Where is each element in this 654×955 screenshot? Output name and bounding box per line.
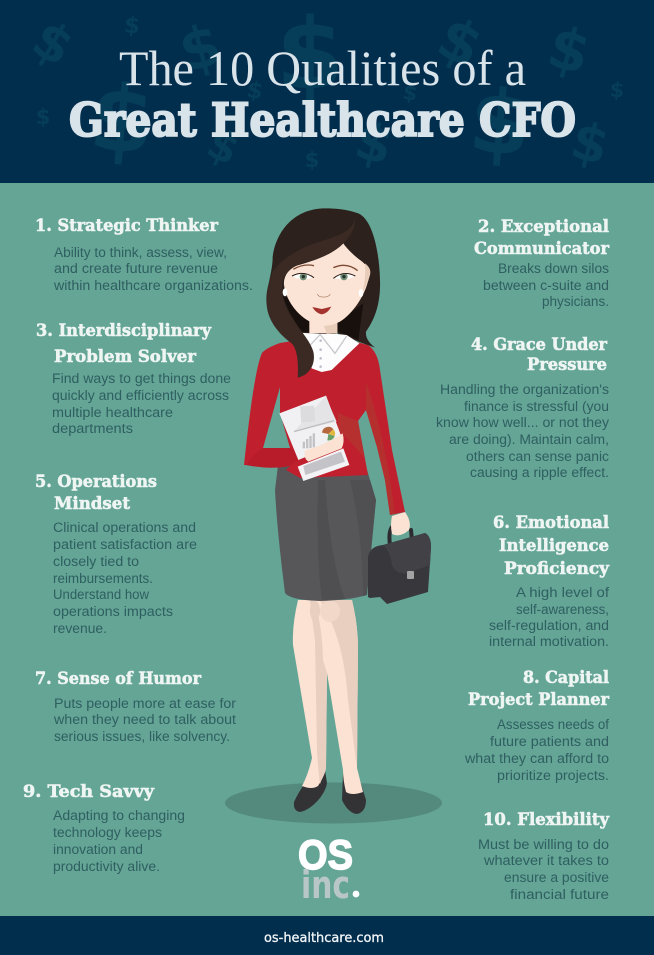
quality 8: capital project planner: Project Planner: [468, 690, 610, 710]
quality 3: interdisciplinary problem solver: Problem Solver: [54, 347, 197, 367]
website address: os-healthcare.com: [264, 931, 384, 946]
quality 6: emotional intelligence proficiency: Intelligence: [499, 536, 609, 556]
shoes: [294, 768, 366, 814]
skirt: [275, 465, 376, 601]
quality 7: sense of humor: 7. Sense of Humor: [35, 669, 202, 689]
quality 10: flexibility: [478, 810, 610, 902]
red sweater: [244, 335, 405, 515]
front hair: [266, 217, 355, 378]
quality 9: tech savvy: 9. Tech Savvy: [23, 782, 155, 802]
quality 8: capital project planner: Assesses needs of: [497, 717, 609, 732]
legs: [293, 600, 363, 794]
dollar sign pattern: $: [36, 105, 50, 129]
quality 9: tech savvy: Adapting to changing: [53, 808, 185, 823]
dollar sign pattern: $: [465, 69, 535, 176]
quality 1: strategic thinker: and create future revenue: [54, 261, 218, 276]
quality 3: interdisciplinary problem solver: 3. Interdisciplinary: [36, 321, 212, 341]
dollar sign pattern: $: [609, 77, 625, 103]
quality 6: emotional intelligence proficiency: [489, 513, 610, 649]
quality 5: operations mindset: closely tied to: [53, 554, 139, 569]
quality 2: exceptional communicator: Breaks down silos: [498, 261, 609, 276]
header banner: [0, 0, 654, 183]
dollar sign pattern: [22, 0, 625, 178]
OS inc. logo: [298, 831, 359, 907]
quality 10: flexibility: whatever it takes to: [483, 853, 609, 868]
quality 6: emotional intelligence proficiency: internal motivation.: [489, 634, 609, 649]
quality 2: exceptional communicator: Communicator: [474, 239, 610, 259]
eyes and brows: [292, 265, 358, 280]
quality 6: emotional intelligence proficiency: self-awareness,: [516, 602, 609, 617]
quality 4: grace under pressure: finance is stressful (you: [464, 399, 609, 414]
quality 4: grace under pressure: [436, 335, 609, 480]
quality 4: grace under pressure: Pressure: [527, 355, 607, 375]
back hair: [267, 208, 380, 348]
dollar sign pattern: $: [172, 10, 228, 86]
neck: [309, 317, 337, 333]
quality 7: sense of humor: serious issues, like solvency.: [54, 729, 230, 744]
quality 5: operations mindset: [35, 472, 197, 636]
quality 4: grace under pressure: know how well... or not they: [436, 415, 609, 430]
dollar sign pattern: $: [427, 3, 493, 81]
quality 9: tech savvy: technology keeps: [53, 825, 162, 840]
OS inc. logo: OS: [298, 831, 353, 878]
quality 10: flexibility: Must be willing to do: [478, 837, 609, 852]
dollar sign pattern: $: [305, 148, 319, 172]
lips: [312, 307, 331, 314]
quality 3: interdisciplinary problem solver: multiple healthcare: [52, 405, 173, 420]
quality 7: sense of humor: [35, 669, 237, 744]
quality 5: operations mindset: 5. Operations: [35, 472, 157, 492]
quality 8: capital project planner: what they can afford to: [464, 751, 609, 766]
financial report papers and hand: [279, 396, 349, 481]
quality 7: sense of humor: Puts people more at ease for: [54, 696, 237, 711]
face: [284, 243, 369, 326]
quality 4: grace under pressure: others can sense panic: [466, 449, 609, 464]
head, hair and collar: [266, 208, 380, 378]
quality 10: flexibility: 10. Flexibility: [483, 810, 610, 830]
quality 5: operations mindset: Mindset: [54, 494, 130, 514]
earrings: [283, 288, 363, 297]
quality 10: flexibility: financial future: [510, 887, 609, 902]
quality 5: operations mindset: revenue.: [53, 621, 107, 636]
title: The 10 Qualities of a: [119, 40, 526, 96]
quality 7: sense of humor: when they need to talk about: [53, 712, 236, 727]
quality 6: emotional intelligence proficiency: self-regulation, and: [489, 618, 609, 633]
quality 5: operations mindset: operations impacts: [53, 604, 173, 619]
quality 3: interdisciplinary problem solver: [36, 321, 231, 436]
quality 4: grace under pressure: 4. Grace Under: [471, 335, 608, 355]
quality 9: tech savvy: productivity alive.: [53, 859, 160, 874]
dollar sign pattern: $: [276, 0, 344, 112]
quality 8: capital project planner: prioritize projects.: [497, 768, 609, 783]
quality 2: exceptional communicator: between c-suite and: [483, 278, 609, 293]
OS inc. logo: inc: [301, 863, 350, 907]
quality 2: exceptional communicator: 2. Exceptional: [478, 217, 610, 237]
illustration: businesswoman CFO: [225, 208, 442, 824]
dollar sign pattern: $: [22, 9, 83, 79]
quality 1: strategic thinker: within healthcare organizations.: [53, 278, 253, 293]
ground shadow: [225, 782, 442, 824]
quality 8: capital project planner: [464, 668, 610, 783]
quality 5: operations mindset: patient satisfaction are: [53, 537, 197, 552]
title: Great Healthcare CFO: [69, 93, 576, 147]
quality 5: operations mindset: reimbursements.: [53, 571, 153, 586]
dollar sign pattern: $: [200, 118, 247, 175]
dollar sign pattern: $: [564, 110, 615, 178]
quality 3: interdisciplinary problem solver: quickly and efficiently across: [52, 388, 229, 403]
quality 5: operations mindset: Clinical operations and: [53, 520, 196, 535]
dollar sign pattern: $: [245, 77, 265, 105]
quality 9: tech savvy: [23, 782, 185, 874]
quality 2: exceptional communicator: physicians.: [542, 294, 609, 309]
quality 4: grace under pressure: Handling the organization's: [440, 382, 609, 397]
quality 1: strategic thinker: [35, 216, 253, 293]
dollar sign pattern: $: [85, 63, 158, 176]
quality 9: tech savvy: innovation and: [53, 842, 143, 857]
quality 6: emotional intelligence proficiency: Proficiency: [504, 559, 610, 579]
quality 6: emotional intelligence proficiency: 6. Emotional: [493, 513, 610, 533]
quality 4: grace under pressure: causing a ripple effect.: [470, 465, 609, 480]
handbag: [368, 512, 431, 604]
dollar sign pattern: $: [348, 110, 399, 178]
title: [69, 40, 576, 147]
dollar sign pattern: $: [401, 80, 419, 106]
pie chart: [322, 427, 335, 441]
quality 8: capital project planner: future patients and: [490, 734, 609, 749]
quality 3: interdisciplinary problem solver: departments: [52, 421, 133, 436]
dollar sign pattern: $: [541, 12, 597, 88]
quality 1: strategic thinker: 1. Strategic Thinker: [35, 216, 219, 236]
quality 10: flexibility: ensure a positive: [504, 870, 609, 885]
quality 1: strategic thinker: Ability to think, assess, view,: [54, 245, 227, 260]
quality 5: operations mindset: Understand how: [53, 587, 149, 602]
quality 6: emotional intelligence proficiency: A high level of: [516, 585, 609, 600]
quality 8: capital project planner: 8. Capital: [523, 668, 609, 688]
quality 3: interdisciplinary problem solver: Find ways to get things done: [52, 371, 231, 386]
dollar sign pattern: $: [123, 12, 141, 40]
quality 2: exceptional communicator: [474, 217, 610, 309]
nose: [317, 294, 330, 297]
quality 4: grace under pressure: are doing). Maintain calm,: [449, 432, 609, 447]
collar: [299, 333, 359, 372]
footer bar: [0, 916, 654, 955]
